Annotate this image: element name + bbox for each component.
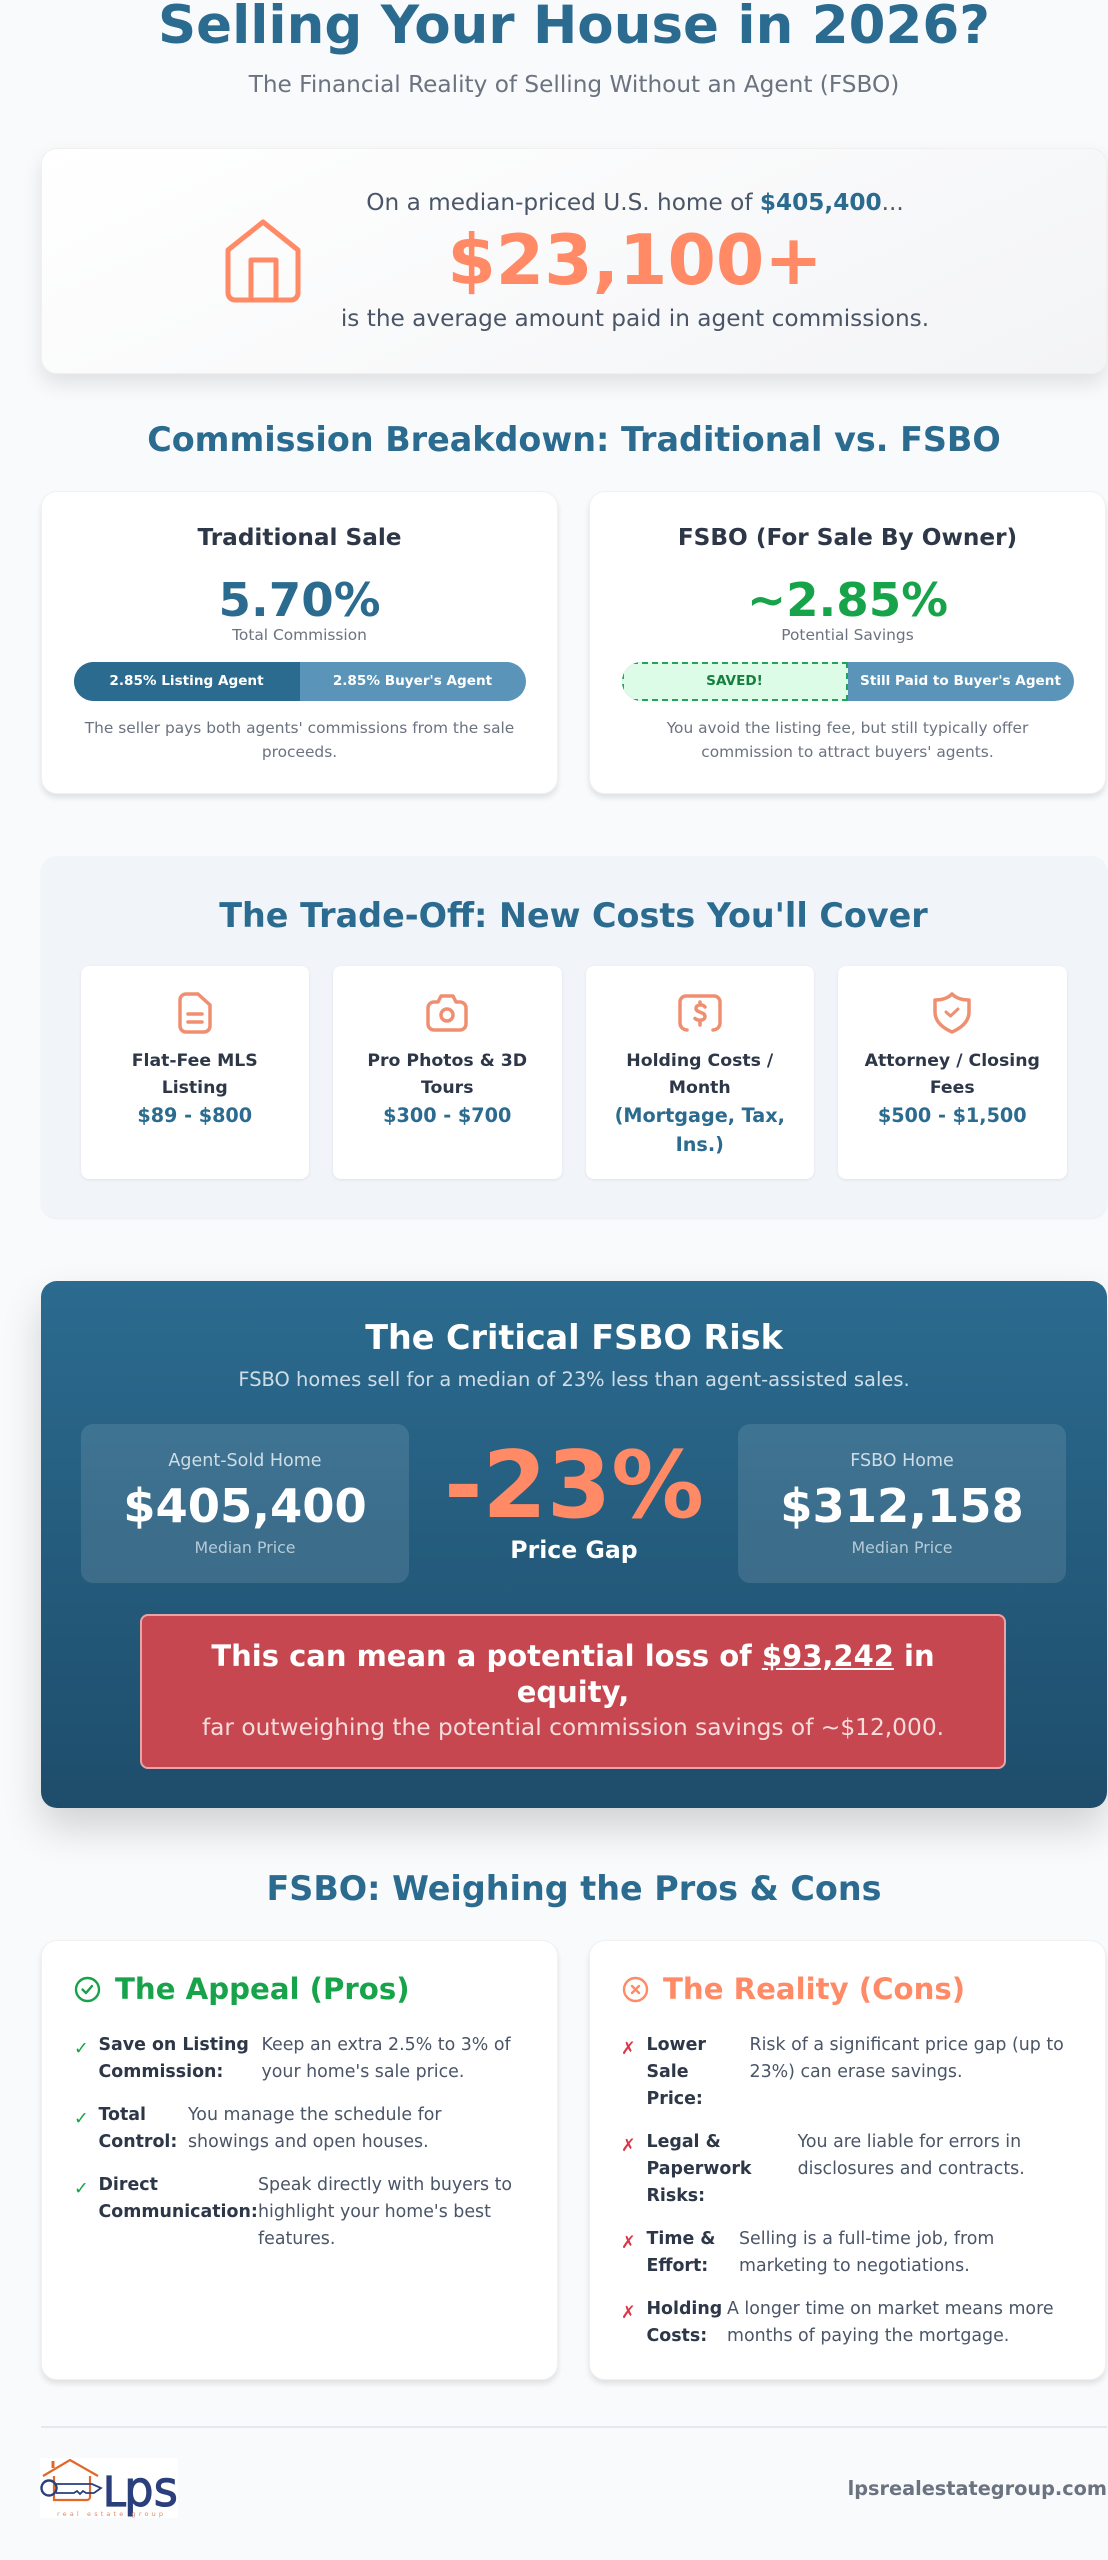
pro item: communication (74, 2175, 512, 2249)
panel heading: The Appeal (Pros) (115, 1972, 410, 2006)
stat: total commission: 5.70% (218, 574, 380, 628)
panel: critical FSBO risk (41, 1281, 1107, 1808)
label and price: $89 - $800 (137, 1104, 252, 1127)
item text: You are liable for errors in (798, 2132, 1021, 2152)
label and price: Tours (421, 1078, 473, 1098)
icon: house (226, 219, 300, 302)
box: FSBO price (738, 1424, 1066, 1583)
item title: Holding (646, 2299, 722, 2319)
label and price (132, 1050, 258, 1127)
item title: Sale (646, 2062, 689, 2082)
description (666, 719, 1028, 761)
icon: money (678, 994, 722, 1032)
description: commission to attract buyers' agents. (701, 743, 994, 761)
price: $405,400 (123, 1479, 367, 1533)
item title: Risks: (646, 2186, 705, 2206)
item title (646, 2299, 722, 2346)
cost card: holding costs (586, 966, 814, 1179)
price: $312,158 (780, 1479, 1024, 1533)
item text: your home's sale price. (262, 2062, 464, 2082)
item text: highlight your home's best (258, 2202, 491, 2222)
stat: price gap percentage: -23% (444, 1431, 704, 1539)
callout headline: equity, (517, 1675, 629, 1709)
callout: potential loss (140, 1614, 1006, 1769)
item title: Communication: (98, 2202, 258, 2222)
label and price (367, 1050, 527, 1127)
website: lpsrealestategroup.com (848, 2477, 1107, 2500)
label and note: Holding Costs / (626, 1050, 773, 1070)
segment: saved (622, 662, 848, 701)
subtitle: The Financial Reality of Selling Without an Agent (FSBO) (249, 71, 899, 98)
item title (646, 2132, 752, 2206)
box label: FSBO Home (850, 1451, 954, 1471)
label and note: Month (669, 1078, 731, 1098)
item text (750, 2035, 1064, 2082)
icon: camera (426, 994, 468, 1032)
item text (798, 2132, 1025, 2179)
item text: A longer time on market means more (727, 2299, 1054, 2319)
item title: Legal & (646, 2132, 721, 2152)
con item: holding (621, 2299, 1054, 2346)
cost card: MLS listing (80, 966, 309, 1179)
item text: Risk of a significant price gap (up to (750, 2035, 1064, 2055)
logo: LPS real estate group: real estate group (57, 2510, 165, 2518)
mark: ✓ (74, 2039, 89, 2059)
description: The seller pays both agents' commissions from the sale (85, 719, 514, 737)
item title (646, 2229, 715, 2276)
panel: cons (589, 1940, 1106, 2380)
price note: Median Price (194, 1538, 296, 1557)
text: commission caption: is the average amount paid in agent commissions. (341, 305, 929, 332)
label and price: Pro Photos & 3D (367, 1050, 527, 1070)
segment: saved: SAVED! (706, 673, 763, 689)
pro item: listing commission (74, 2035, 511, 2082)
icon: x circle (622, 1976, 648, 2002)
callout headline: This can mean a potential loss of $93,242 in (211, 1639, 935, 1673)
heading: The Trade-Off: New Costs You'll Cover (219, 896, 928, 935)
segment: buyer's agent: 2.85% Buyer's Agent (333, 673, 492, 689)
item text: Selling is a full-time job, from (739, 2229, 994, 2249)
label and price: Flat-Fee MLS (132, 1050, 258, 1070)
panel: trade-off costs (40, 856, 1106, 1218)
item text: months of paying the mortgage. (727, 2326, 1009, 2346)
mark: ✗ (621, 2136, 636, 2156)
pro item: control (74, 2105, 442, 2152)
item title: Costs: (646, 2326, 707, 2346)
mark: ✗ (621, 2303, 636, 2323)
item title: Time & (646, 2229, 715, 2249)
subheading: FSBO homes sell for a median of 23% less than agent-assisted sales. (238, 1368, 910, 1391)
item title: Total (98, 2105, 146, 2125)
card heading: Traditional Sale (197, 524, 402, 551)
con item: time (621, 2229, 994, 2276)
card heading: FSBO (For Sale By Owner) (678, 524, 1017, 551)
description: proceeds. (262, 743, 337, 761)
bar: commission split (74, 662, 526, 701)
icon: shield (933, 992, 971, 1034)
logo: LPS real estate group: L (103, 2468, 126, 2516)
item title: Commission: (98, 2062, 223, 2082)
item text: Keep an extra 2.5% to 3% of (262, 2035, 511, 2055)
stat label: price gap: Price Gap (510, 1536, 638, 1564)
panel: pros (41, 1940, 558, 2380)
item title (98, 2105, 177, 2152)
item title: Price: (646, 2089, 703, 2109)
heading: commission breakdown: Commission Breakdown: Traditional vs. FSBO (147, 420, 1001, 459)
item text (258, 2175, 512, 2249)
item title: Save on Listing (98, 2035, 249, 2055)
item text: disclosures and contracts. (798, 2159, 1025, 2179)
item title (98, 2175, 258, 2222)
item text: Speak directly with buyers to (258, 2175, 512, 2195)
mark: ✗ (621, 2233, 636, 2253)
mark: ✓ (74, 2179, 89, 2199)
item text: showings and open houses. (188, 2132, 429, 2152)
heading: pros and cons: FSBO: Weighing the Pros & Cons (266, 1869, 882, 1908)
bar: FSBO split (622, 662, 1074, 701)
item title: Paperwork (646, 2159, 752, 2179)
description (84, 719, 514, 761)
text: median home price: On a median-priced U.S. home of $405,400... (366, 189, 904, 216)
panel: FSBO (589, 490, 1106, 794)
label and price: Fees (930, 1078, 975, 1098)
label and price: $300 - $700 (383, 1104, 511, 1127)
label and note: Ins.) (676, 1133, 724, 1156)
item title: Effort: (646, 2256, 708, 2276)
price note: Median Price (851, 1538, 952, 1557)
description: You avoid the listing fee, but still typically offer (667, 719, 1028, 737)
logo: LPS real estate group (40, 2458, 178, 2518)
label and price: $500 - $1,500 (878, 1104, 1027, 1127)
label and note (615, 1050, 785, 1156)
stat label: Total Commission (232, 626, 367, 644)
panel heading: The Reality (Cons) (663, 1972, 965, 2006)
mark: ✗ (621, 2039, 636, 2059)
label and price: Attorney / Closing (865, 1050, 1040, 1070)
stat: potential savings: ~2.85% (747, 574, 948, 628)
item text (188, 2105, 442, 2152)
icon: check circle (74, 1976, 100, 2002)
item title: Control: (98, 2132, 177, 2152)
cost card: photos (333, 966, 562, 1179)
callout note: far outweighing the potential commission savings of ~$12,000. (202, 1714, 944, 1741)
stat label: Potential Savings (781, 626, 914, 644)
segment: listing agent: 2.85% Listing Agent (109, 673, 264, 689)
label and price (864, 1050, 1040, 1127)
item text: You manage the schedule for (188, 2105, 442, 2125)
item title (98, 2035, 249, 2082)
mark: ✓ (74, 2109, 89, 2129)
stat: average commission: $23,100+ (447, 220, 823, 301)
item text (739, 2229, 994, 2276)
label and note: (Mortgage, Tax, (615, 1104, 785, 1127)
item text: marketing to negotiations. (739, 2256, 970, 2276)
callout headline (211, 1639, 935, 1709)
segment: listing agent (74, 662, 300, 701)
item text (262, 2035, 511, 2082)
item title: Lower (646, 2035, 706, 2055)
heading: The Critical FSBO Risk (365, 1318, 783, 1357)
box label: Agent-Sold Home (168, 1451, 322, 1471)
item title: Direct (98, 2175, 158, 2195)
item text (727, 2299, 1054, 2346)
cost card: attorney (838, 966, 1066, 1179)
icon: document (178, 992, 212, 1034)
con item: legal (621, 2132, 1025, 2206)
con item: price (621, 2035, 1064, 2109)
panel: traditional sale (41, 490, 558, 794)
box: agent-sold price (81, 1424, 409, 1583)
item text: features. (258, 2229, 335, 2249)
item text: 23%) can erase savings. (750, 2062, 963, 2082)
item title (646, 2035, 706, 2109)
panel: hero commission callout (41, 148, 1107, 374)
segment: buyer's agent: Still Paid to Buyer's Agent (860, 673, 1061, 689)
label and price: Listing (162, 1078, 228, 1098)
